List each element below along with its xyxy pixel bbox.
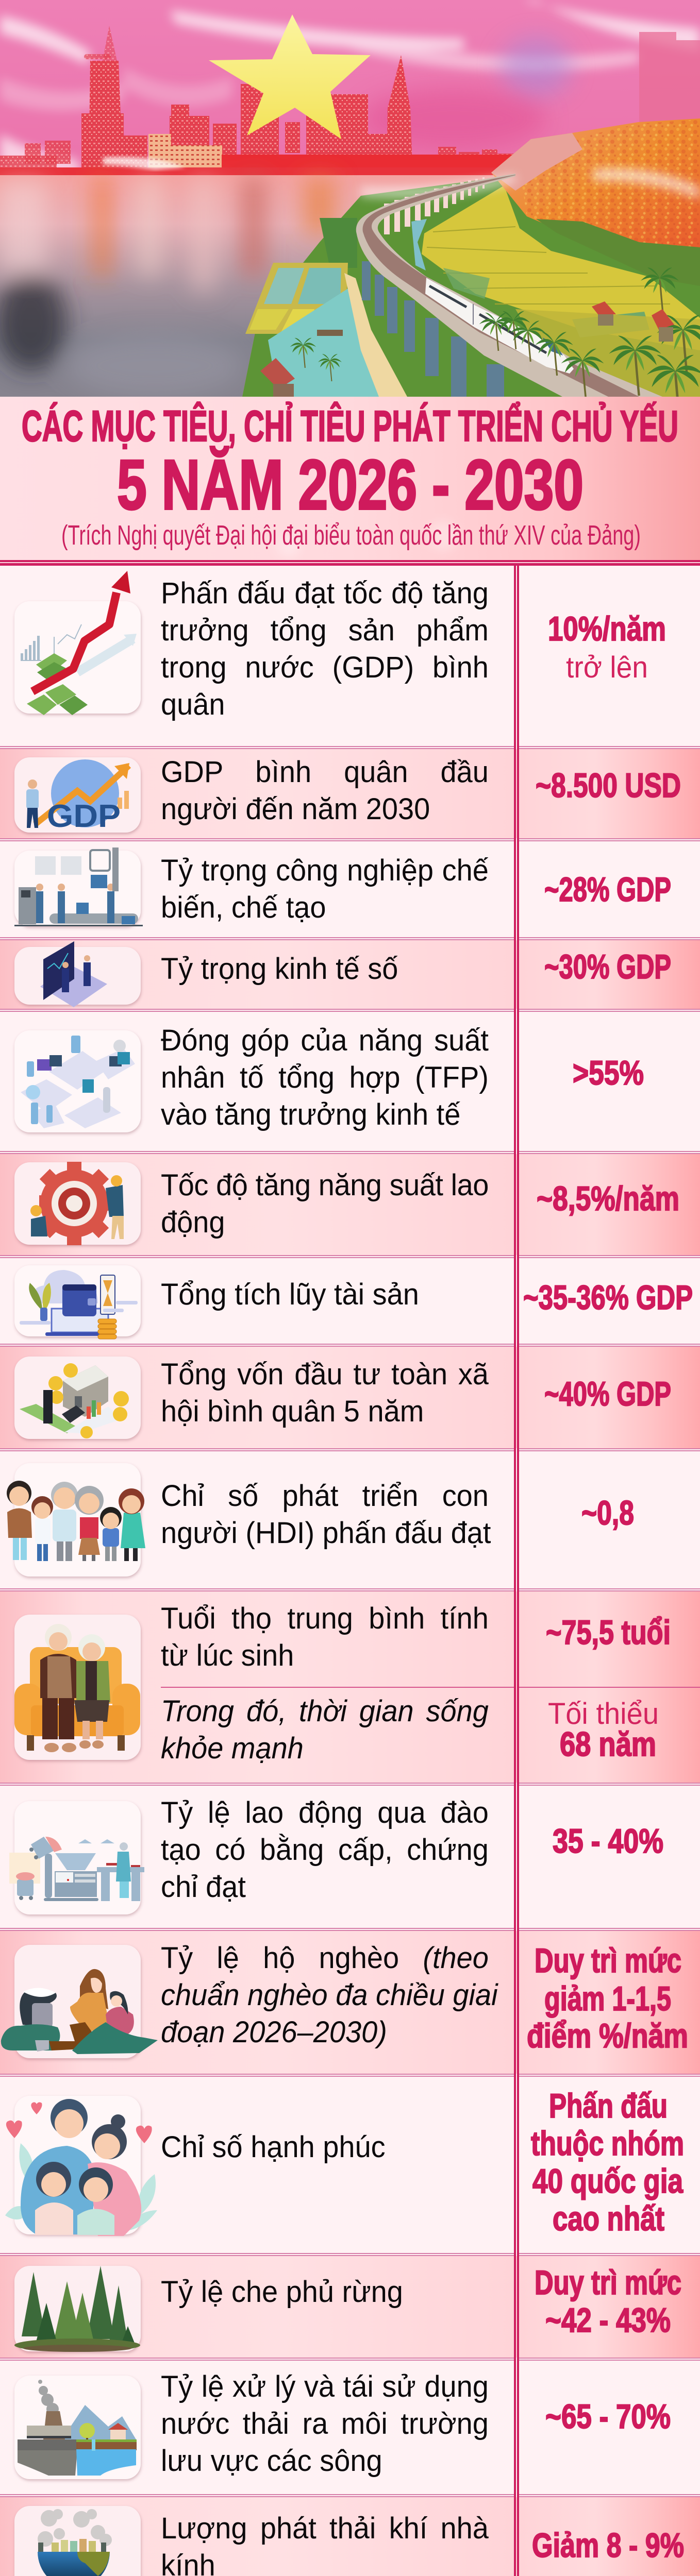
text: lưu vực các sông <box>161 2444 382 2478</box>
row 15: wastewater treatment <box>14 2369 671 2487</box>
icon: wallet laptop coins <box>14 1265 141 1339</box>
icon: mother, child and belongings <box>1 1945 158 2058</box>
text: Tỷ trọng công nghiệp chế <box>161 854 489 887</box>
row 5: TFP <box>14 1023 644 1141</box>
hill <box>491 118 700 252</box>
text: Tỷ trọng kinh tế số <box>161 952 398 986</box>
value: ~65 - 70% <box>545 2397 671 2435</box>
text: healthy life: Trong đó, thời gian sống <box>161 1694 489 1728</box>
text: Tỷ lệ lao động qua đào <box>161 1796 489 1829</box>
upper arcade <box>384 177 485 234</box>
train <box>425 278 574 374</box>
row 6: labour productivity <box>0 1154 700 1255</box>
value: cao nhất <box>553 2199 664 2238</box>
background towers right <box>639 32 700 123</box>
row 14: forest cover <box>0 2256 700 2358</box>
value <box>548 609 666 684</box>
text <box>161 1167 501 1245</box>
row 1: GDP growth <box>14 571 666 730</box>
text: Tổng vốn đầu tư toàn xã <box>161 1358 489 1391</box>
text: người đến năm 2030 <box>161 792 430 826</box>
value: ~75,5 tuổi <box>546 1613 671 1651</box>
value: Tối thiểu <box>548 1697 659 1731</box>
text: hội bình quân 5 năm <box>161 1395 424 1428</box>
icon: digital platform <box>14 941 141 1007</box>
value <box>531 2087 684 2238</box>
text: tạo có bằng cấp, chứng <box>161 1833 489 1867</box>
viaduct deck <box>356 174 662 397</box>
text: Tuổi thọ trung bình tính <box>161 1602 489 1635</box>
text: healthy life: khỏe mạnh <box>161 1732 304 1765</box>
icon: forest island <box>14 2266 141 2352</box>
text: Chỉ số hạnh phúc <box>161 2130 386 2164</box>
icon: food processing machine <box>9 1801 144 1914</box>
text <box>161 1023 501 1141</box>
row 7: asset accumulation <box>14 1265 693 1339</box>
text <box>161 754 501 832</box>
star <box>209 14 371 139</box>
icon: rising red arrow with money <box>14 571 141 715</box>
text <box>161 2369 501 2487</box>
icon: isometric data network <box>14 1030 141 1132</box>
text <box>161 2511 501 2576</box>
land <box>242 170 700 397</box>
icon: polluted and clean water <box>14 2376 141 2479</box>
city skyline <box>0 26 518 175</box>
text: đoạn 2026–2030) <box>161 2015 387 2049</box>
value <box>548 1697 659 1763</box>
rice fields <box>422 185 700 350</box>
palms <box>479 313 512 351</box>
text <box>161 853 501 930</box>
icon: factory workers conveyor <box>14 848 143 926</box>
text: healthy life <box>161 1693 501 1771</box>
row 16: greenhouse emissions <box>0 2497 700 2576</box>
lower piers <box>362 261 504 397</box>
text <box>161 1357 501 1434</box>
text: Đóng góp của năng suất <box>161 1024 489 1057</box>
text: nước thải ra môi trường <box>161 2407 489 2441</box>
text <box>161 575 501 730</box>
row 2: GDP per capita <box>0 749 700 838</box>
row 9: HDI <box>7 1463 634 1577</box>
row 11: trained labour <box>9 1795 663 1914</box>
text: chuẩn nghèo đa chiều giai <box>161 1978 498 2012</box>
value: 10%/năm <box>548 609 666 648</box>
fish ponds <box>245 263 348 334</box>
houses <box>592 301 674 342</box>
icon: elderly couple on sofa <box>14 1615 141 1760</box>
icon: building, coins and money <box>14 1357 141 1439</box>
text: Tốc độ tăng năng suất lao <box>161 1168 489 1202</box>
text: Tổng tích lũy tài sản <box>161 1278 419 1311</box>
row 4: digital economy <box>0 940 700 1009</box>
text: chỉ đạt <box>161 1870 246 1904</box>
text: quân <box>161 688 225 721</box>
icon: happy family with hearts <box>5 2096 157 2236</box>
value: trở lên <box>566 651 648 684</box>
panel: title band <box>0 397 700 561</box>
text <box>161 1601 501 1678</box>
value: >55% <box>573 1054 644 1092</box>
hero illustration: flag sky, city, river, railway <box>0 0 700 420</box>
text: Tỷ lệ hộ nghèo (theo <box>161 1941 489 1975</box>
icon: red gear target with workers <box>14 1162 141 1245</box>
row 12: poverty rate <box>0 1931 700 2074</box>
text: trưởng tổng sản phẩm <box>161 614 489 647</box>
icon: half globe with factories and smoke <box>14 2506 141 2576</box>
text <box>161 1940 501 2059</box>
text: Tỷ lệ che phủ rừng <box>161 2275 403 2309</box>
text: Chỉ số phát triển con <box>161 1479 489 1513</box>
value: Phấn đấu <box>549 2087 668 2125</box>
text: Phấn đấu đạt tốc độ tăng <box>161 577 489 610</box>
row 13: happiness index <box>5 2087 684 2238</box>
row 8: total social investment <box>0 1347 700 1448</box>
icon: GDP globe <box>14 757 141 834</box>
text: nhân tố tổng hợp (TFP) <box>161 1061 489 1094</box>
icon: multi-generation family <box>7 1463 145 1577</box>
text <box>161 1795 501 1913</box>
text: Lượng phát thải khí nhà <box>161 2512 489 2545</box>
text: từ lúc sinh <box>161 1639 294 1672</box>
value: 68 năm <box>560 1725 656 1763</box>
text: trong nước (GDP) bình <box>161 651 489 684</box>
canal and beach <box>268 289 379 397</box>
row 3: processing industry <box>14 848 671 930</box>
text: người (HDI) phấn đấu đạt <box>161 1516 491 1550</box>
text: vào tăng trưởng kinh tế <box>161 1098 460 1131</box>
text: biến, chế tạo <box>161 891 326 924</box>
text: Tỷ lệ xử lý và tái sử dụng <box>161 2370 489 2403</box>
value <box>527 1941 688 2055</box>
value: ~42 - 43% <box>545 2301 671 2339</box>
value <box>535 2263 681 2339</box>
text: động <box>161 1206 225 1239</box>
value: ~0,8 <box>581 1494 634 1532</box>
text: GDP bình quân đầu <box>161 755 489 789</box>
river <box>0 175 515 397</box>
icon: GDP globe: GDP <box>47 799 121 834</box>
row 10: life expectancy <box>0 1591 700 1783</box>
value: 35 - 40% <box>553 1822 663 1860</box>
text <box>161 1478 501 1555</box>
